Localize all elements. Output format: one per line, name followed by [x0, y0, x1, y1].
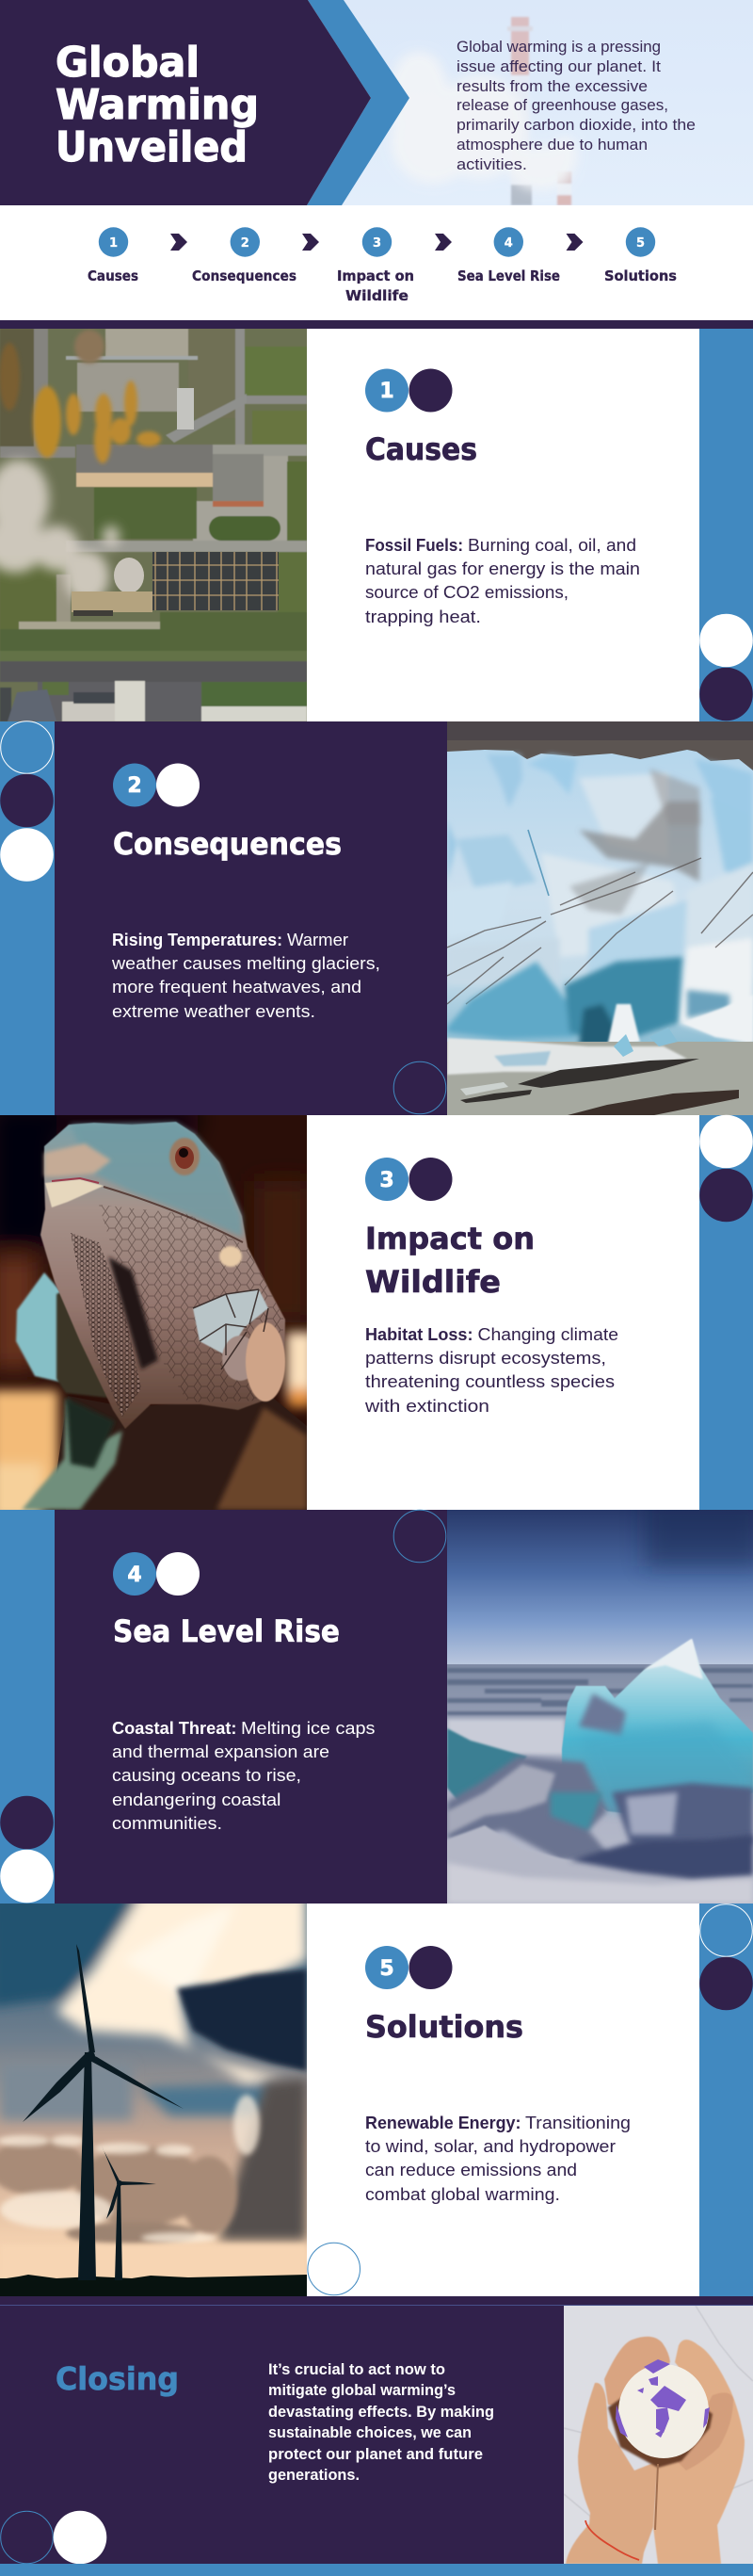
- side strip: [699, 1904, 753, 2296]
- head and neck: [40, 1122, 285, 1429]
- nav step 4: Sea Level Rise: [457, 267, 560, 284]
- navigation strip: [88, 227, 677, 304]
- body text: natural gas for energy is the main: [365, 559, 640, 578]
- intro text: Global warming is a pressing: [457, 39, 661, 56]
- steam cloud: [0, 460, 120, 603]
- photo: glacier: [447, 721, 753, 1115]
- side strip: [0, 721, 55, 1115]
- lit clouds: [0, 2139, 237, 2244]
- intro text: atmosphere due to human: [457, 137, 648, 154]
- nav step 5: Solutions: [604, 267, 677, 284]
- panel: solutions: [0, 1894, 753, 2296]
- main iceberg: [562, 1639, 753, 1821]
- nav step 5: [604, 227, 677, 284]
- dirt streaks: [447, 830, 753, 1004]
- body text: more frequent heatwaves, and: [112, 977, 361, 996]
- photo: wind turbines: [0, 1904, 307, 2296]
- body text: Renewable Energy:: [365, 2113, 521, 2132]
- body text: [111, 930, 380, 1021]
- decorative circles: [699, 1904, 753, 2010]
- big turbine: [23, 1944, 184, 2280]
- side strip: [699, 1115, 753, 1510]
- decorative circles: [1, 2511, 106, 2564]
- closing text: [268, 2361, 494, 2484]
- nav step 4: [457, 227, 560, 284]
- nav step 4: 4: [505, 236, 513, 251]
- heading: Sea Level Rise: [113, 1613, 340, 1649]
- divider band: [0, 320, 753, 329]
- crest: [71, 1233, 141, 1417]
- bracelet: [585, 2520, 639, 2560]
- closing text: devastating effects. By making: [268, 2404, 494, 2421]
- text panel background: [55, 1510, 447, 1904]
- body text: causing oceans to rise,: [112, 1765, 301, 1785]
- iguana eye: [169, 1138, 200, 1175]
- number badge 2: 2: [127, 774, 142, 798]
- heading: Solutions: [365, 2009, 523, 2045]
- body text: weather causes melting glaciers,: [111, 953, 380, 973]
- text panel background: [307, 1904, 699, 2296]
- body text: with extinction: [364, 1396, 489, 1416]
- arrow: [302, 234, 319, 251]
- bottom band: [0, 2564, 753, 2576]
- body text: Warmer: [287, 930, 348, 949]
- side strip: [0, 1510, 55, 1904]
- body text: communities.: [112, 1813, 222, 1833]
- body text: [365, 535, 640, 626]
- intro text: activities.: [457, 156, 527, 173]
- body text: trapping heat.: [365, 607, 481, 626]
- body text: Fossil Fuels:: [365, 535, 463, 555]
- nav step 2: 2: [241, 236, 249, 251]
- closing text: generations.: [268, 2467, 360, 2484]
- nav step 3: Wildlife: [345, 287, 409, 304]
- number badge 1: 1: [379, 380, 394, 403]
- title: [56, 39, 259, 171]
- dark cloud: [177, 1969, 307, 2071]
- body text: [365, 2113, 631, 2204]
- photo: iceberg: [447, 1510, 753, 1904]
- body text: Habitat Loss:: [365, 1324, 473, 1344]
- body text: patterns disrupt ecosystems,: [365, 1348, 606, 1368]
- nav step 3: Impact on: [337, 267, 414, 284]
- palm shadow: [608, 2372, 713, 2468]
- body text: Coastal Threat:: [112, 1718, 237, 1738]
- water and ice debris: [447, 1042, 753, 1115]
- decorative circles: [0, 1796, 54, 1903]
- title: Unveiled: [56, 123, 248, 171]
- body text: to wind, solar, and hydropower: [365, 2136, 616, 2156]
- intro text: results from the excessive: [457, 78, 648, 95]
- number badge 5: [365, 1946, 452, 1989]
- heading: Consequences: [113, 826, 342, 862]
- closing text: sustainable choices, we can: [268, 2424, 472, 2441]
- panel: impact on wildlife: [0, 1106, 753, 1520]
- iguana body: [56, 1396, 307, 1510]
- body text: Rising Temperatures:: [112, 930, 282, 949]
- panel: closing: [0, 2296, 753, 2564]
- header banner: [0, 0, 753, 205]
- body text: and thermal expansion are: [112, 1742, 329, 1761]
- panel: consequences: [0, 721, 753, 1115]
- text panel background: [55, 721, 447, 1115]
- snow drifts: [447, 1757, 612, 1860]
- side strip: [699, 329, 753, 721]
- outline circle: [308, 2243, 360, 2295]
- heading: Impact on: [365, 1221, 535, 1256]
- closing text: protect our planet and future: [268, 2446, 483, 2463]
- number badge 3: 3: [379, 1169, 394, 1192]
- number badge 2: [113, 763, 200, 806]
- body text: Changing climate: [478, 1324, 618, 1344]
- shoulder scales: [193, 1289, 285, 1401]
- blue ice base: [447, 957, 729, 1046]
- title: Warming: [56, 81, 259, 129]
- photo: hands holding soap ball: [564, 2306, 753, 2564]
- soap ball: [618, 2364, 709, 2458]
- number badge 4: [113, 1552, 200, 1596]
- outline circle: [393, 1510, 446, 1563]
- body text: can reduce emissions and: [365, 2160, 577, 2179]
- number badge 5: 5: [379, 1957, 394, 1981]
- photo: iguana: [0, 1115, 307, 1510]
- closing text: mitigate global warming’s: [268, 2382, 456, 2399]
- body text: combat global warming.: [365, 2184, 560, 2204]
- panel: causes: [0, 329, 753, 721]
- body text: Transitioning: [525, 2113, 631, 2132]
- nav step 1: [88, 227, 138, 284]
- body text: [112, 1718, 375, 1833]
- decorative circles: [699, 1115, 753, 1222]
- text panel background: [307, 329, 699, 721]
- closing background: [0, 2296, 753, 2564]
- nav step 3: [337, 227, 414, 304]
- photo: aerial view of power plant: [0, 329, 307, 721]
- heading: [365, 1221, 535, 1300]
- body text: endangering coastal: [112, 1790, 280, 1809]
- arrow: [435, 234, 452, 251]
- right hand: [653, 2340, 745, 2564]
- nav step 2: Consequences: [192, 267, 296, 284]
- body text: extreme weather events.: [112, 1001, 315, 1021]
- intro text: primarily carbon dioxide, into the: [457, 117, 696, 134]
- scale texture: [99, 1205, 285, 1402]
- body text: threatening countless species: [365, 1371, 615, 1391]
- small turbine: [102, 2146, 156, 2280]
- nav step 2: [192, 227, 296, 284]
- nav step 1: 1: [109, 236, 118, 251]
- header photo: smokestack sky: [323, 0, 753, 205]
- cooling frame: [152, 552, 279, 610]
- decorative circles: [699, 614, 753, 721]
- header arrow: blue chevron: [307, 0, 409, 205]
- body text: Melting ice caps: [241, 1718, 375, 1738]
- intro text: release of greenhouse gases,: [457, 97, 668, 114]
- cloud wall: [218, 2078, 307, 2241]
- nav step 5: 5: [636, 236, 645, 251]
- arrow: [170, 234, 187, 251]
- blue dewlap: [16, 1272, 69, 1382]
- intro text: issue affecting our planet. It: [457, 58, 661, 75]
- rocks: [518, 1059, 699, 1088]
- body text: [364, 1324, 618, 1416]
- arrow: [567, 234, 584, 251]
- title: Global: [56, 39, 200, 87]
- number badge 3: [365, 1158, 452, 1201]
- body text: source of CO2 emissions,: [365, 582, 569, 602]
- decorative circles: [0, 721, 54, 882]
- left hand: [566, 2383, 658, 2564]
- text panel background: [307, 1115, 699, 1510]
- nav step 1: Causes: [88, 267, 138, 284]
- closing text: It’s crucial to act now to: [268, 2361, 445, 2378]
- header arrow: dark panel: [0, 0, 371, 205]
- outline circle: [393, 1061, 446, 1114]
- intro text: [457, 39, 696, 173]
- number badge 4: 4: [127, 1563, 142, 1587]
- number badge 1: [365, 369, 452, 413]
- body text: Burning coal, oil, and: [468, 535, 636, 555]
- left ice block: [447, 1728, 527, 1816]
- nav step 3: 3: [373, 236, 381, 251]
- panel: sea level rise: [0, 1500, 753, 1904]
- heading: Closing: [56, 2360, 179, 2397]
- ground: [0, 2278, 307, 2296]
- dirt: [569, 769, 701, 915]
- heading: Causes: [365, 431, 477, 467]
- heading: Wildlife: [365, 1264, 501, 1300]
